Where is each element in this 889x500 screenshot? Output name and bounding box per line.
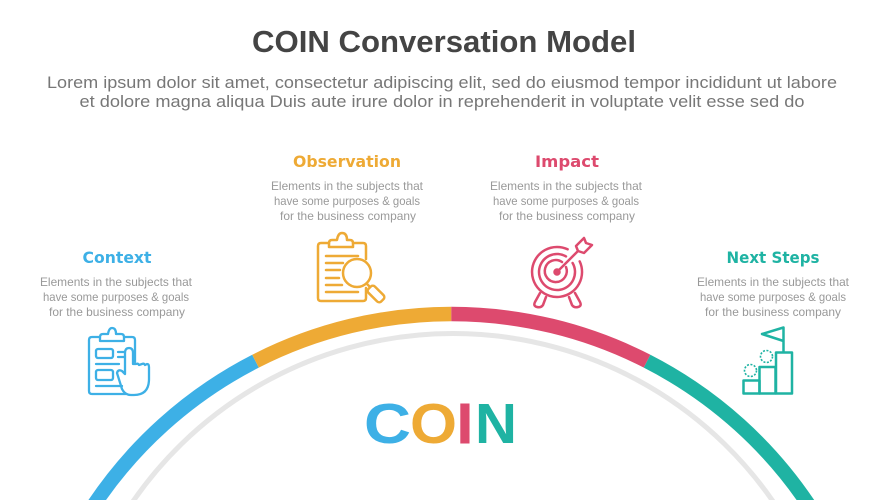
text block: next steps bbox=[697, 276, 850, 319]
text block: impact bbox=[490, 180, 643, 223]
COIN centre logo bbox=[364, 392, 517, 456]
COIN centre logo: I bbox=[457, 392, 473, 456]
COIN centre logo: C bbox=[364, 392, 411, 456]
panel: next steps bbox=[697, 248, 850, 394]
heading: context: Context bbox=[82, 248, 152, 267]
text block: observation bbox=[271, 180, 424, 223]
icon: steps with flag bbox=[744, 328, 792, 394]
arc segment: context bbox=[90, 361, 256, 500]
subtitle: Lorem ipsum dolor sit amet, consectetur adipiscing elit, sed do eiusmod tempor incididunt ut labore bbox=[47, 73, 837, 92]
panel: observation bbox=[271, 152, 424, 304]
text block: context: have some purposes & goals bbox=[43, 291, 189, 304]
subtitle bbox=[47, 73, 837, 111]
text block: observation: for the business company bbox=[280, 210, 416, 223]
icon: target with arrow bbox=[532, 238, 592, 307]
outer segmented arc bbox=[90, 314, 812, 500]
text block: next steps: have some purposes & goals bbox=[700, 291, 846, 304]
panel: context bbox=[40, 248, 193, 395]
text block: context: Elements in the subjects that bbox=[40, 276, 193, 289]
text block: next steps: for the business company bbox=[705, 306, 841, 319]
text block: impact: Elements in the subjects that bbox=[490, 180, 643, 193]
arc segment: impact bbox=[451, 314, 647, 361]
text block: observation: have some purposes & goals bbox=[274, 195, 420, 208]
arc segment: observation bbox=[256, 314, 451, 361]
arc segment: next steps bbox=[647, 361, 812, 500]
COIN centre logo: N bbox=[475, 392, 517, 456]
text block: impact: for the business company bbox=[499, 210, 635, 223]
inner grey arc bbox=[127, 334, 779, 500]
text block: context: for the business company bbox=[49, 306, 185, 319]
heading: observation: Observation bbox=[293, 152, 401, 171]
text block: observation: Elements in the subjects that bbox=[271, 180, 424, 193]
text block: next steps: Elements in the subjects that bbox=[697, 276, 850, 289]
text block: impact: have some purposes & goals bbox=[493, 195, 639, 208]
subtitle: et dolore magna aliqua Duis aute irure dolor in reprehenderit in voluptate velit esse sed do bbox=[80, 92, 804, 111]
icon: clipboard with magnifier bbox=[318, 233, 386, 304]
COIN centre logo: O bbox=[410, 392, 457, 456]
icon: clipboard with hand bbox=[89, 328, 149, 395]
title: COIN Conversation Model bbox=[252, 24, 636, 59]
heading: impact: Impact bbox=[535, 152, 599, 171]
text block: context bbox=[40, 276, 193, 319]
heading: next steps: Next Steps bbox=[726, 248, 820, 267]
panel: impact bbox=[490, 152, 643, 307]
